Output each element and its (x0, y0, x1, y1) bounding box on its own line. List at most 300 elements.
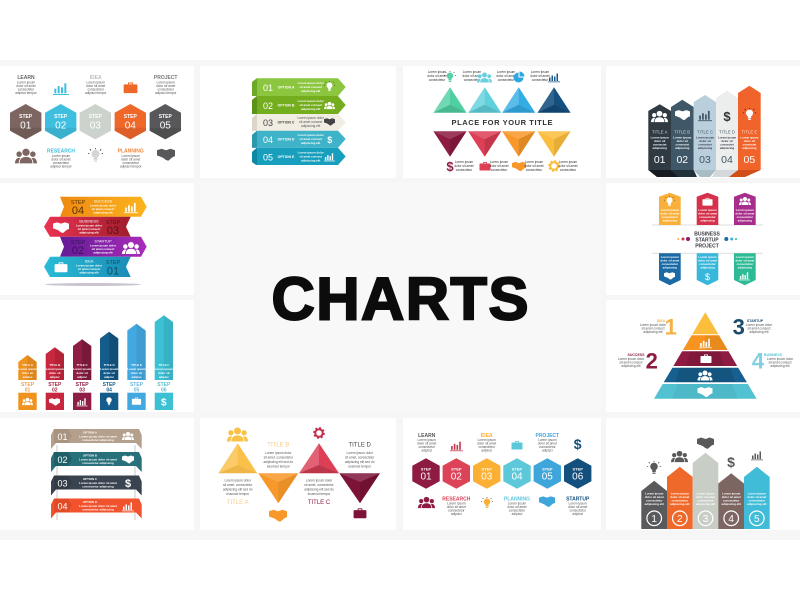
panel: business startup project tabs: Lorem ipsum (736, 208, 754, 212)
panel: rising arrow bars: Lorem ipsum (100, 367, 119, 371)
panel: six step hexagons: STARTUP (566, 496, 590, 502)
panel: triangles with title: PLACE FOR YOUR TITLE (452, 118, 552, 127)
panel: six step hexagons: RESEARCH (442, 496, 471, 502)
panel: numbered arrow columns: Lorem ipsum (671, 492, 689, 496)
panel: five option ribbons: sit amet consect (299, 154, 322, 158)
panel: arrow columns with titles: 02 (676, 154, 688, 166)
panel: six step hexagons: dolor sit amet (417, 442, 436, 446)
panel: pyramid: 2 (646, 348, 658, 374)
panel: six step hexagons: 01 (420, 472, 432, 482)
panel: six step hexagons: STEP (542, 466, 553, 472)
panel: five step hexagons: STEP (54, 114, 68, 120)
panel: five option ribbons: sit amet consect (299, 120, 322, 124)
panel: triangles with title: consectetur (526, 168, 543, 172)
panel: six step hexagons: Lorem ipsum (417, 438, 436, 442)
panel: six step hexagons: dolor sit amet (538, 442, 557, 446)
panel: rising arrow bars: $ (161, 398, 167, 408)
panel: five step hexagons: 03 (90, 121, 101, 132)
panel: business startup project tabs: Lorem ipsum (698, 255, 717, 259)
panel: numbered arrow columns: dolor sit amet (696, 495, 715, 499)
panel: arrow columns with titles: dolor sit (654, 139, 665, 143)
panel: arrow columns with titles: dolor sit (744, 139, 755, 143)
panel: five step hexagons: consectetur (157, 88, 175, 92)
panel: arrow columns with titles: TITLE B (674, 130, 690, 134)
panel: rising arrow bars: STEP (21, 382, 35, 388)
panel: alternating triangles: sit amet, consectetur (304, 483, 335, 487)
panel: rising arrow bars: dolor sit (103, 371, 115, 375)
panel: arrow columns with titles: consectet (743, 142, 756, 146)
panel: pyramid: 1 (665, 314, 677, 340)
panel: pyramid: sit amet consect (619, 360, 643, 364)
panel: folded option bands: OPTION D (83, 500, 97, 504)
panel: five step hexagons: STEP (89, 114, 102, 120)
panel: six step hexagons: adipisci (421, 448, 432, 452)
panel: pyramid: adipiscing elit (643, 330, 663, 334)
panel: five option ribbons: Lorem ipsum dolor (298, 133, 325, 137)
panel: six step hexagons: consectetur (509, 508, 526, 512)
panel: rising arrow bars: 02 (52, 388, 58, 394)
panel: rising arrow bars: dolor sit (49, 371, 61, 375)
panel: arrow columns with titles: TITLE E (742, 130, 757, 134)
panel: arrow columns with titles: TITLE D (719, 130, 735, 134)
panel: numbered arrow columns: Lorem ipsum (722, 492, 741, 496)
panel: five option ribbons: Lorem ipsum dolor (298, 81, 325, 85)
panel: folded option bands: Lorem ipsum dolor sit amet (79, 481, 117, 485)
panel: six step hexagons: adipisci (572, 512, 583, 516)
panel: six step hexagons: consectetur (448, 508, 465, 512)
panel: business startup project tabs: Lorem ipsum (661, 208, 679, 212)
panel: five option ribbons: 03 (263, 118, 273, 128)
panel: rising arrow bars: Lorem ipsum (18, 367, 37, 371)
panel: alternating triangles: sit amet, consectetur (264, 456, 294, 460)
panel: folded option bands: OPTION A (83, 430, 98, 434)
panel: numbered arrow columns: dolor sit amet (722, 495, 741, 499)
panel: numbered arrow columns: Lorem ipsum (748, 492, 766, 496)
panel: business startup project tabs: consectetur (737, 262, 754, 266)
panel: five step hexagons: dolor sit amet (121, 158, 140, 162)
panel: triangles with title: consectetur (429, 78, 446, 82)
panel: six step hexagons: $ (574, 436, 582, 452)
panel: numbered arrow columns: consectetur (697, 498, 715, 502)
panel: five step hexagons: adipisci tempor (15, 91, 38, 95)
panel: triangles with title: Lorem ipsum (497, 70, 516, 74)
panel: rising arrow bars: adipisc (159, 375, 169, 379)
panel: five step hexagons: Lorem ipsum (156, 80, 175, 84)
panel: five option ribbons: OPTION A (278, 86, 295, 90)
panel: arrow columns with titles: Lorem ipsum (740, 136, 759, 140)
panel: arrow columns with titles: dolor sit (721, 139, 733, 143)
panel: pyramid: adipiscing elit (621, 364, 641, 368)
panel: pyramid: adipiscing elit (749, 330, 769, 334)
panel: rising arrow bars: TITLE C (77, 363, 88, 367)
panel: business startup project tabs: adipiscing (663, 218, 677, 222)
panel: five option ribbons: adipiscing elit (301, 124, 320, 128)
panel: rising arrow bars: 03 (79, 388, 85, 394)
panel: rising arrow bars: dolor sit (131, 371, 142, 375)
panel: six step hexagons: STEP (451, 466, 462, 472)
panel: rising arrow bars (0, 300, 194, 412)
panel: five step hexagons: Lorem ipsum (121, 154, 140, 158)
panel: arrow columns with titles: 01 (654, 154, 666, 166)
panel: interlocked step arrows: Lorem ipsum dolor (76, 224, 103, 228)
panel: numbered arrow columns: consectetur (672, 498, 689, 502)
panel: alternating triangles: eiusmod tempor (226, 492, 250, 496)
panel: pyramid: BUSINESS (764, 353, 783, 357)
panel: five step hexagons: IDEA (90, 75, 102, 81)
panel: folded option bands: 04 (57, 502, 68, 512)
panel: five step hexagons: STEP (19, 114, 33, 120)
panel: pyramid: SUCCESS (628, 353, 645, 357)
panel: five option ribbons: Lorem ipsum dolor (297, 116, 325, 120)
panel: triangles with title: dolor sit amet (427, 74, 447, 78)
panel: folded option bands (0, 418, 194, 530)
panel: folded option bands: Lorem ipsum dolor sit amet (79, 434, 117, 438)
panel: rising arrow bars: Lorem ipsum (46, 367, 64, 371)
panel: six step hexagons: Lorem ipsum (508, 502, 527, 506)
panel: alternating triangles: TITLE A (227, 500, 249, 506)
panel: alternating triangles: adipiscing elit sed do (304, 488, 334, 492)
panel: rising arrow bars: TITLE E (131, 363, 142, 367)
panel: business startup project tabs: adipiscing (663, 266, 677, 270)
panel: arrow columns with titles: consectet (676, 142, 689, 146)
panel: numbered arrow columns (606, 418, 800, 530)
panel: arrow columns with titles: TITLE C (697, 130, 713, 134)
panel: arrow columns with titles: adipiscing (742, 146, 757, 150)
panel: five option ribbons: adipiscing elit (301, 107, 320, 111)
panel: numbered arrow columns: 2 (677, 514, 683, 525)
panel: five option ribbons: sit amet consect (299, 103, 322, 107)
panel: triangles with title: Lorem ipsum (490, 160, 509, 164)
panel: six step hexagons: 06 (572, 472, 584, 482)
panel: five step hexagons: Lorem ipsum (17, 80, 36, 84)
panel: alternating triangles: Lorem ipsum dolor (224, 478, 252, 482)
panel: interlocked step arrows: STEP (106, 260, 121, 266)
panel: six step hexagons: consectetur (569, 508, 587, 512)
panel: folded option bands: 02 (57, 455, 68, 465)
panel: folded option bands: OPTION C (83, 477, 98, 481)
panel: pyramid: STARTUP (747, 319, 764, 323)
panel: alternating triangles: TITLE C (308, 500, 331, 506)
panel: folded option bands: consectetur adipiscing (82, 438, 114, 442)
panel: six step hexagons (403, 418, 601, 530)
panel: pyramid (606, 300, 800, 412)
panel: triangles with title: Lorem ipsum (525, 160, 544, 164)
panel: numbered arrow columns: dolor sit amet (747, 495, 766, 499)
panel: numbered arrow columns: Lorem ipsum (696, 492, 715, 496)
panel: five step hexagons: consectetur (122, 161, 140, 165)
panel: business startup project tabs: consectetur (737, 215, 754, 219)
panel: five step hexagons: adipisci tempor (50, 164, 73, 168)
panel: six step hexagons: IDEA (481, 433, 493, 439)
panel: rising arrow bars: Lorem ipsum (73, 367, 92, 371)
panel: interlocked step arrows: 03 (107, 225, 119, 237)
panel: interlocked step arrows: adipiscing elit (79, 270, 99, 274)
panel: rising arrow bars: STEP (103, 382, 116, 388)
panel: pyramid: 3 (733, 314, 745, 340)
panel: numbered arrow columns: adipiscing elit (670, 502, 689, 506)
panel: rising arrow bars: TITLE D (104, 363, 115, 367)
panel: folded option bands: 03 (57, 478, 68, 488)
panel: five step hexagons: PROJECT (154, 75, 178, 81)
panel: rising arrow bars: adipisc (50, 375, 60, 379)
panel: five step hexagons: consectetur (53, 161, 70, 165)
panel: rising arrow bars: STEP (48, 382, 62, 388)
panel: interlocked step arrows: 02 (72, 245, 84, 257)
panel: rising arrow bars: adipisc (132, 375, 142, 379)
panel: rising arrow bars: adipisc (77, 375, 87, 379)
panel: business startup project tabs: adipiscing (738, 266, 752, 270)
panel: pyramid: IDEA (657, 319, 666, 323)
panel: alternating triangles: adipiscing elit sed do (223, 488, 253, 492)
panel: interlocked step arrows: 01 (107, 266, 119, 278)
panel: interlocked step arrows: sit amet consect (92, 247, 114, 251)
panel: numbered arrow columns: consectetur (723, 498, 740, 502)
panel: numbered arrow columns: Lorem ipsum (645, 492, 664, 496)
panel: six step hexagons: consectetur (418, 445, 436, 449)
panel: folded option bands: $ (125, 478, 131, 490)
panel: five step hexagons: 02 (55, 121, 67, 132)
panel: five step hexagons: consectetur (87, 88, 105, 92)
panel: five step hexagons: adipisci tempor (155, 91, 177, 95)
panel: numbered arrow columns: adipiscing elit (645, 502, 664, 506)
panel: triangles with title: dolor sit amet (524, 164, 544, 168)
panel: rising arrow bars: TITLE A (22, 363, 34, 367)
panel: business startup project tabs: $ (705, 272, 710, 282)
panel: arrow columns with titles: dolor sit (677, 139, 688, 143)
panel: six step hexagons: dolor sit amet (568, 505, 587, 509)
panel: five option ribbons: OPTION B (278, 104, 295, 108)
panel: five step hexagons: RESEARCH (47, 148, 75, 154)
panel: five step hexagons: dolor sit amet (51, 158, 71, 162)
central title panel (200, 183, 601, 412)
panel: pyramid: sit amet consect (747, 326, 771, 330)
panel: alternating triangles: sit amet, consectetur (345, 456, 375, 460)
panel: five option ribbons: 05 (263, 152, 273, 162)
panel: six step hexagons: 03 (481, 472, 493, 482)
panel: business startup project tabs: dolor sit amet (660, 258, 679, 262)
panel: rising arrow bars: 01 (25, 388, 30, 394)
panel: folded option bands: Lorem ipsum dolor sit amet (79, 458, 117, 462)
panel: folded option bands: consectetur adipiscing (82, 508, 114, 512)
panel: business startup project tabs: BUSINESS (694, 232, 720, 238)
panel: rising arrow bars: dolor sit (76, 371, 88, 375)
panel: six step hexagons: consectetur (478, 445, 496, 449)
panel: six step hexagons: Lorem ipsum (477, 438, 496, 442)
panel: five step hexagons: Lorem ipsum (52, 154, 71, 158)
panel: five step hexagons: LEARN (17, 75, 35, 81)
panel: five step hexagons: STEP (159, 114, 172, 120)
panel: five step hexagons (0, 66, 194, 178)
panel: business startup project tabs: consectetur (699, 262, 717, 266)
panel: arrow columns with titles: consectet (698, 142, 712, 146)
panel: numbered arrow columns: consectetur (646, 498, 663, 502)
panel: numbered arrow columns: dolor sit amet (670, 495, 689, 499)
panel: interlocked step arrows: adipiscing elit (93, 250, 113, 254)
panel: arrow columns with titles: consectet (720, 142, 734, 146)
panel: six step hexagons: dolor sit amet (477, 442, 496, 446)
panel: five option ribbons: sit amet consect (299, 137, 322, 141)
panel: triangles with title: dolor sit amet (489, 164, 509, 168)
panel: folded option bands: OPTION B (83, 454, 97, 458)
panel: five option ribbons (200, 66, 396, 178)
panel: folded option bands: Lorem ipsum dolor sit amet (79, 504, 117, 508)
panel: alternating triangles: adipiscing elit sed do (345, 460, 375, 464)
panel: alternating triangles: TITLE B (267, 442, 289, 448)
panel: arrow columns with titles: consectet (653, 142, 666, 146)
panel: six step hexagons: STEP (512, 466, 523, 472)
panel: arrow columns with titles: Lorem ipsum (651, 136, 669, 140)
panel: rising arrow bars: 04 (106, 388, 112, 394)
panel: numbered arrow columns: 3 (703, 514, 709, 525)
panel: six step hexagons: adipisci (451, 512, 462, 516)
panel: business startup project tabs: dolor sit amet (698, 258, 717, 262)
panel: triangles with title: dolor sit amet (530, 74, 550, 78)
panel: triangles with title: dolor sit amet (454, 164, 474, 168)
panel: rising arrow bars: TITLE B (49, 363, 60, 367)
panel: six step hexagons: STEP (481, 466, 492, 472)
panel: interlocked step arrows: adipiscing elit (93, 210, 113, 214)
panel: triangles with title (403, 66, 601, 178)
panel: interlocked step arrows: Lorem ipsum dolor (76, 264, 103, 268)
panel: business startup project tabs: dolor sit amet (735, 258, 754, 262)
panel: arrow columns with titles: Lorem ipsum (718, 136, 737, 140)
panel: folded option bands: 01 (57, 432, 68, 442)
panel: rising arrow bars: 05 (134, 388, 139, 394)
panel: five option ribbons: 04 (263, 135, 273, 145)
panel: five step hexagons: consectetur (18, 88, 35, 92)
panel: arrow columns with titles: 03 (699, 154, 711, 166)
panel: rising arrow bars: dolor sit (22, 371, 33, 375)
panel: interlocked step arrows: STEP (106, 220, 121, 226)
panel: arrow columns with titles: Lorem ipsum (696, 136, 715, 140)
panel: five step hexagons: dolor sit amet (156, 84, 175, 88)
panel: triangles with title: consectetur (532, 78, 549, 82)
panel: triangles with title: Lorem ipsum (463, 70, 482, 74)
panel: pyramid: sit amet consect (641, 326, 665, 330)
panel: arrow columns with titles: dolor sit (699, 139, 711, 143)
panel: arrow columns with titles: adipiscing (675, 146, 690, 150)
panel: five option ribbons: $ (327, 135, 332, 145)
panel: alternating triangles: eiusmod tempor (267, 464, 291, 468)
panel: six step hexagons: 05 (542, 472, 553, 482)
panel: triangles with title: $ (446, 159, 454, 174)
panel: interlocked step arrows: IDEA (85, 260, 94, 264)
panel: pyramid: adipiscing elit (770, 364, 790, 368)
panel: alternating triangles (200, 418, 396, 530)
panel: arrow columns with titles: adipiscing (698, 146, 712, 150)
panel: business startup project tabs: dolor sit amet (660, 212, 679, 216)
panel: alternating triangles: TITLE D (349, 442, 372, 448)
panel: triangles with title: dolor sit amet (558, 164, 578, 168)
panel: five step hexagons: 01 (20, 121, 32, 132)
panel: pyramid: Lorem ipsum dolor (618, 357, 645, 361)
panel: interlocked step arrows: 04 (72, 205, 84, 217)
panel: six step hexagons: dolor sit amet (447, 505, 466, 509)
panel: six step hexagons: Lorem ipsum (447, 502, 466, 506)
panel: interlocked step arrows: sit amet consect (78, 227, 100, 231)
panel: arrow columns with titles: 05 (744, 154, 755, 166)
panel: five option ribbons: adipiscing elit (301, 158, 320, 162)
panel: five step hexagons: dolor sit amet (86, 84, 105, 88)
panel: pyramid: Lorem ipsum dolor (767, 357, 794, 361)
panel: arrow columns with titles: TITLE A (652, 130, 668, 134)
panel: rising arrow bars: 06 (161, 388, 167, 394)
panel: six step hexagons: STEP (421, 466, 432, 472)
panel: numbered arrow columns: adipiscing elit (696, 502, 715, 506)
panel: arrow columns with titles: Lorem ipsum (673, 136, 692, 140)
panel: interlocked step arrows (0, 183, 194, 295)
panel: six step hexagons: adipisci (481, 448, 492, 452)
panel: rising arrow bars: STEP (130, 382, 144, 388)
panel: numbered arrow columns: adipiscing elit (747, 502, 766, 506)
panel: alternating triangles: eiusmod tempor (348, 464, 372, 468)
panel: five option ribbons: 02 (263, 101, 273, 111)
panel: numbered arrow columns: 5 (754, 514, 760, 525)
panel: alternating triangles: Lorem ipsum dolor (346, 451, 374, 455)
panel: triangles with title: consectetur (464, 78, 481, 82)
panel: six step hexagons: 04 (511, 472, 523, 482)
panel: numbered arrow columns: dolor sit amet (645, 495, 664, 499)
panel: five option ribbons: sit amet consect (299, 85, 322, 89)
panel: rising arrow bars: adipisc (104, 375, 114, 379)
panel: business startup project tabs: Lorem ipsum (698, 208, 717, 212)
panel: rising arrow bars: Lorem ipsum (127, 367, 146, 371)
panel: numbered arrow columns: adipiscing elit (722, 502, 741, 506)
panel: business startup project tabs: PROJECT (695, 244, 719, 250)
panel: interlocked step arrows: sit amet consect (92, 207, 114, 211)
panel: triangles with title: consectetur (491, 168, 508, 172)
panel: pyramid: 4 (752, 348, 765, 374)
panel: interlocked step arrows: sit amet consect (78, 267, 100, 271)
panel: triangles with title: consectetur (456, 168, 473, 172)
panel: pyramid: Lorem ipsum dolor (746, 323, 773, 327)
panel: triangles with title: Lorem ipsum (428, 70, 447, 74)
panel: triangles with title: Lorem ipsum (531, 70, 550, 74)
panel: interlocked step arrows: Lorem ipsum dolor (90, 244, 117, 248)
panel: alternating triangles: eiusmod tempor (308, 492, 331, 496)
panel: five option ribbons: Lorem ipsum dolor (298, 150, 325, 154)
panel: business startup project tabs: consectetur (662, 215, 679, 219)
panel: five step hexagons: PLANNING (118, 148, 144, 154)
panel: rising arrow bars: dolor sit (158, 371, 170, 375)
panel: business startup project tabs: dolor sit amet (698, 212, 717, 216)
panel: business startup project tabs: Lorem ipsum (661, 255, 679, 259)
panel: rising arrow bars: STEP (76, 382, 89, 388)
panel: six step hexagons: 02 (451, 472, 462, 482)
panel: arrow columns with titles: adipiscing (720, 146, 734, 150)
panel: five option ribbons: OPTION D (278, 138, 295, 142)
panel: triangles with title: consectetur (560, 168, 577, 172)
panel: folded option bands: consectetur adipiscing (82, 484, 114, 488)
panel: numbered arrow columns: 1 (651, 514, 657, 525)
panel: interlocked step arrows: STEP (71, 200, 86, 206)
panel: business startup project tabs: STARTUP (695, 238, 719, 244)
panel: alternating triangles: Lorem ipsum dolor (265, 451, 292, 455)
panel: five step hexagons: 05 (160, 121, 171, 132)
panel: business startup project tabs: adipiscing (738, 218, 752, 222)
panel: five step hexagons: 04 (125, 121, 136, 132)
panel: business startup project tabs: consectetur (699, 215, 717, 219)
panel: rising arrow bars: TITLE F (158, 363, 169, 367)
panel: alternating triangles: Lorem ipsum dolor (306, 478, 333, 482)
panel: interlocked step arrows: STARTUP (94, 240, 112, 244)
panel: five step hexagons: dolor sit amet (16, 84, 36, 88)
panel: five step hexagons: adipisci tempor (85, 91, 107, 95)
panel: rising arrow bars: Lorem ipsum (155, 367, 173, 371)
panel: five step hexagons: STEP (124, 114, 137, 120)
panel: numbered arrow columns: 4 (728, 514, 734, 525)
panel: six step hexagons: PLANNING (504, 496, 530, 502)
